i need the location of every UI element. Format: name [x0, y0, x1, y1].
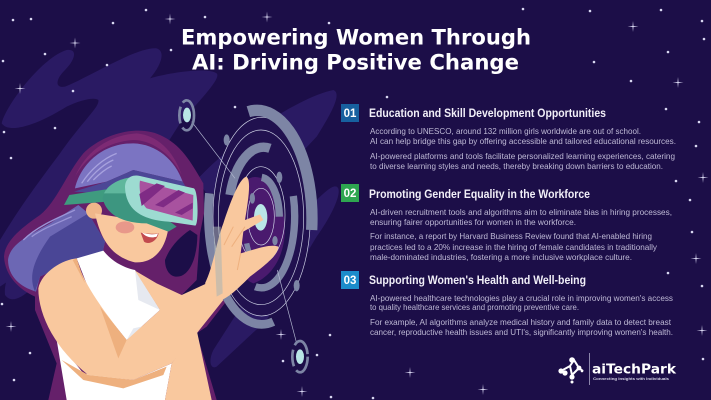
heading 01: Education and Skill Development Opportunities: [369, 106, 606, 120]
bottom right node: [292, 341, 308, 372]
body 03: For example, AI algorithms analyze medical history and family data to detect breast: [370, 317, 672, 327]
body 03: [370, 293, 674, 337]
logo wordmark: aiTechPark: [592, 362, 676, 378]
body 02: male-dominated industries, fostering a more inclusive workplace culture.: [370, 252, 632, 262]
badge 01: [341, 104, 359, 122]
face: [86, 203, 168, 262]
dark gap behind neck: [165, 230, 197, 277]
badge 02: [341, 184, 359, 202]
body 02: AI-driven recruitment tools and algorithms aim to eliminate bias in hiring processes,: [370, 207, 672, 217]
body 02: For instance, a report by Harvard Business Review found that AI-enabled hiring: [370, 231, 652, 241]
hologram rings: [192, 110, 312, 343]
body 01: [370, 126, 676, 171]
logo: aiTechPark: [558, 353, 676, 385]
body 03: cancer, reproductive health issues and UTI's, significantly improving women's health.: [370, 327, 673, 337]
badge 02: 02: [344, 188, 356, 200]
body 02: [370, 207, 672, 262]
body 03: to quality healthcare services and promoting preventive care.: [370, 302, 579, 312]
badge 03: [341, 271, 359, 289]
hologram nodes: [224, 134, 300, 291]
title: [181, 26, 531, 76]
illustration: woman with VR headset and hologram: [4, 100, 312, 400]
background swaths: [0, 48, 339, 367]
body 01: AI can help bridge this gap by offering accessible and tailored educational resources.: [370, 136, 676, 146]
badge 03: 03: [344, 275, 356, 287]
title: AI: Driving Positive Change: [192, 50, 519, 76]
VR headset: [64, 176, 198, 232]
body 02: ensuring fairer opportunities for women in the workforce.: [370, 217, 576, 227]
torso and arm skin: [38, 258, 223, 380]
logo tagline: Connecting Insights with Individuals: [593, 377, 669, 381]
heading 02: Promoting Gender Equality in the Workforce: [369, 187, 590, 201]
top left node: [179, 100, 194, 130]
section 02: [341, 184, 672, 262]
heading 03: Supporting Women's Health and Well-being: [369, 273, 586, 287]
section 03: [341, 271, 674, 337]
body 01: AI-powered platforms and tools facilitate personalized learning experiences, catering: [370, 151, 675, 161]
body 01: to diverse learning styles and needs, thereby breaking down barriers to education.: [370, 161, 663, 171]
body 03: AI-powered healthcare technologies play a crucial role in improving women's access: [370, 293, 674, 303]
logo icon: [558, 357, 583, 384]
hand: [205, 177, 278, 300]
body 01: According to UNESCO, around 132 million girls worldwide are out of school.: [370, 126, 641, 136]
hair: [8, 143, 187, 292]
body 02: practices led to a 20% increase in the hiring of female candidates in traditionally: [370, 242, 658, 252]
section 01: [341, 104, 676, 171]
white top: [57, 251, 172, 400]
magenta silhouette outline: [4, 131, 230, 400]
title: Empowering Women Through: [181, 26, 531, 50]
badge 01: 01: [344, 108, 357, 120]
